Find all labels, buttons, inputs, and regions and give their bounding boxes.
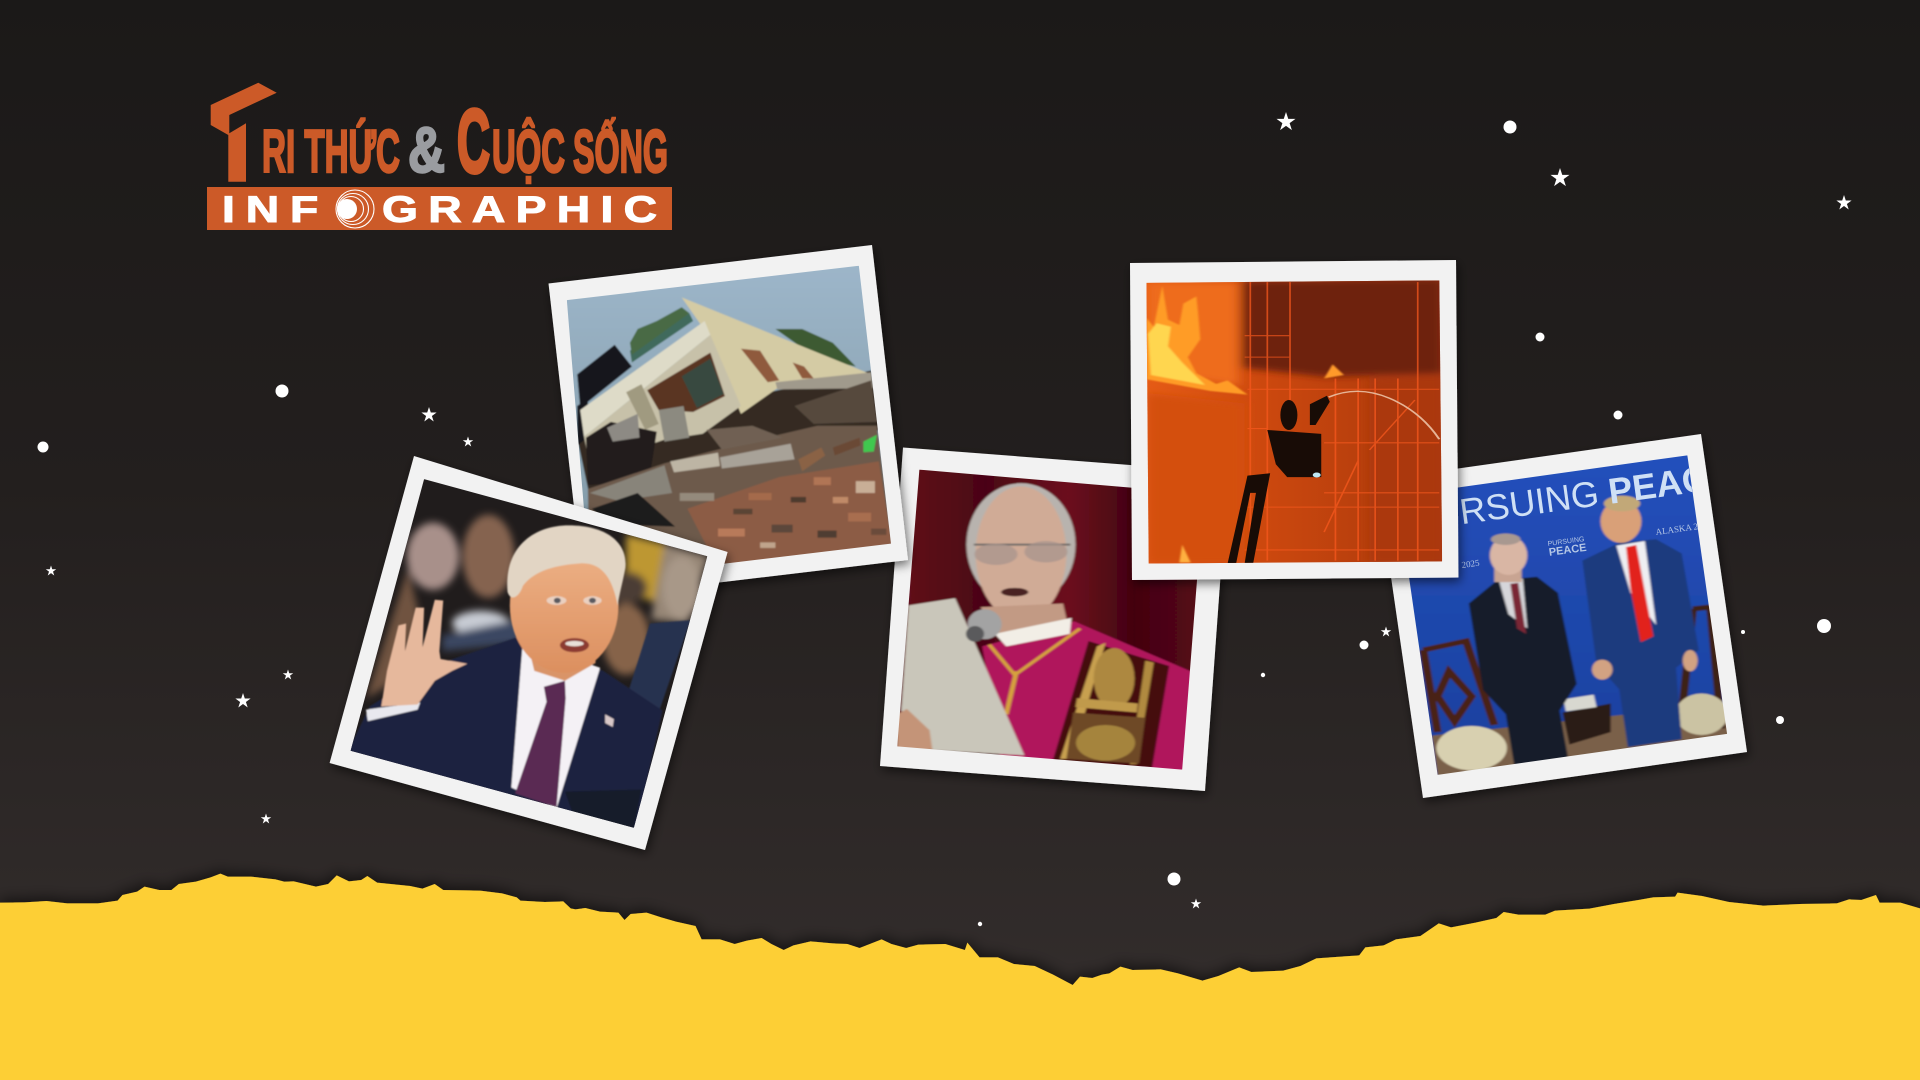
banner icon: concentric O (336, 190, 374, 228)
backdrop lettering (1461, 468, 1698, 568)
logo text: SỐNG: SỐNG (573, 118, 668, 185)
logo text: UỘC: UỘC (492, 118, 565, 185)
picture (343, 473, 714, 833)
picture (1409, 456, 1727, 775)
small text: Alaska 2025: ALASKA 2025 (1655, 519, 1713, 537)
frame (330, 456, 728, 850)
small text: 2025: 2025 (1461, 558, 1481, 570)
photo: Trump taking oath (330, 456, 728, 850)
photo: high-rise fire with firefighter (1130, 260, 1458, 580)
picture (1142, 279, 1446, 566)
decorative stars (46, 112, 1852, 908)
logo large C: C (457, 92, 490, 192)
photo: Putin and Trump at Alaska summit (1377, 434, 1747, 798)
small text: Pursuing Peace logo: PEACE (1548, 542, 1587, 559)
logo T mark (211, 83, 277, 182)
torn yellow paper band (0, 874, 1920, 1080)
logo ampersand: & (408, 114, 445, 186)
frame (1377, 434, 1747, 798)
logo text: RI THỨC: RI THỨC (262, 118, 400, 185)
fire truck ladder and basket (1228, 396, 1330, 564)
banner text: GRAPHIC: GRAPHIC (382, 188, 657, 230)
logo: Tri Thức & Cuộc Sống Infographic (207, 83, 672, 230)
picture (567, 266, 891, 564)
logo orange banner (207, 187, 672, 230)
frame (548, 245, 908, 598)
frame (1130, 260, 1458, 580)
frame (880, 448, 1228, 791)
decorative dots (38, 120, 1831, 926)
banner text: INF: INF (222, 188, 318, 230)
photo: collapsed building (548, 245, 908, 598)
picture (897, 470, 1197, 770)
scaffolding (1245, 282, 1439, 561)
headline: Pursuing Peace: PURSUING PEACE (1408, 454, 1734, 539)
small text: Pursuing Peace logo: PURSUING (1547, 536, 1585, 548)
photo: pope speaking (880, 448, 1228, 791)
